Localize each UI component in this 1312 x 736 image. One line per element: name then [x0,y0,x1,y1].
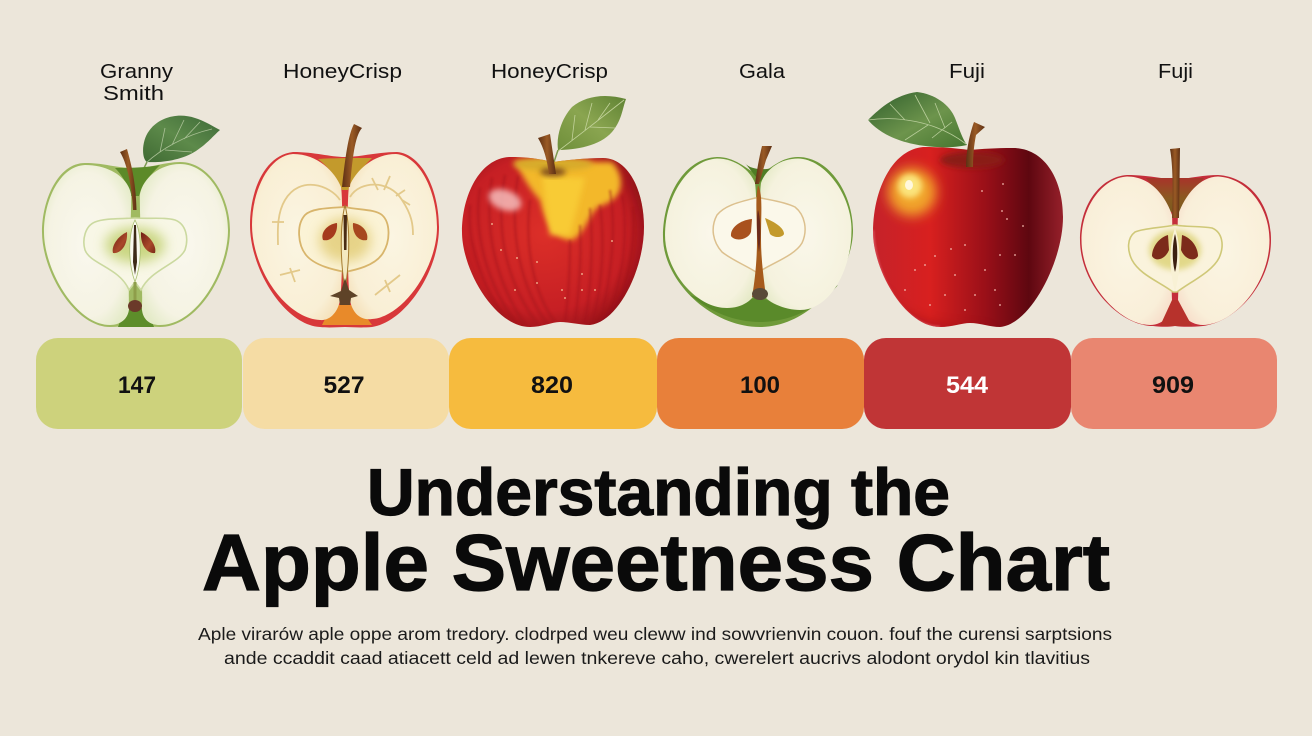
segment: 544: 544 [946,372,989,399]
sweetness scale bar [36,338,1277,429]
apple: Gala halved [663,146,853,327]
speckles [904,183,1024,311]
column label: Granny Smith: Smith [103,82,164,105]
stem [1170,148,1180,218]
core outline [1129,225,1222,292]
speckles [491,223,613,299]
seeds [113,232,127,253]
segment: 909 [1071,338,1277,429]
description text [198,624,1112,668]
stem cavity [513,157,593,171]
skin [873,147,1063,327]
core outline [299,207,389,272]
segment: 147 [36,338,242,429]
flesh [252,154,342,320]
leaf [868,92,967,147]
stem [538,134,556,174]
highlight [486,185,524,215]
leaf [553,96,626,165]
apple: HoneyCrisp halved [250,124,439,327]
seeds [322,223,337,240]
description text: Aple virarów aple oppe arom tredory. clodrped weu cleww ind sowvrienvin couon. fouf the curensi sarptsions [198,624,1112,644]
calyx [330,278,358,305]
stripes [469,175,634,325]
apple: HoneyCrisp whole [460,96,650,330]
skin [42,162,230,327]
segment: 820: 820 [531,372,573,399]
segment: 820 [449,338,657,429]
apple: Fuji whole [868,92,1063,335]
core slit [341,205,349,290]
core slit [130,220,140,282]
stem [342,124,362,187]
column label: Gala: Gala [739,60,786,83]
yellow blush [888,168,936,216]
column label: Fuji: Fuji [949,60,985,83]
calyx [128,300,142,312]
seeds [731,219,752,239]
flesh [1082,176,1172,325]
flesh [44,165,131,325]
leaf [137,116,220,182]
segment: 100 [657,338,864,429]
skin [1080,175,1271,327]
core line [752,185,766,297]
stem [755,146,772,184]
column label: Fuji second: Fuji [1158,60,1193,83]
segment: 100: 100 [740,372,780,399]
core outline [84,218,187,290]
skin [663,157,853,327]
stem [120,149,136,210]
core outline [713,198,805,272]
stem [966,122,985,167]
flesh [665,158,757,308]
title: Understanding the [367,455,950,529]
calyx [752,288,768,300]
segment: 544 [864,338,1071,429]
column label: HoneyCrisp: HoneyCrisp [283,60,402,83]
texture arcs [272,176,413,295]
description text: ande ccaddit caad atiacett celd ad lewen tnkereve caho, cwerelert aucrivs alodont orydol kin tlavitius [224,648,1090,668]
seeds [1152,235,1169,259]
column label: HoneyCrisp second: HoneyCrisp [491,60,608,83]
segment: 147: 147 [118,372,156,399]
column label: Granny Smith: Granny [100,60,174,83]
column label: Granny Smith [100,60,174,105]
dark cavity [940,152,1004,168]
yellow blush [515,162,621,240]
title: Apple Sweetness Chart [202,518,1110,607]
segment: 527 [243,338,449,429]
skin [462,157,644,327]
segment: 909: 909 [1152,372,1194,399]
title [202,455,1110,607]
segment: 527: 527 [324,372,364,399]
apple: Granny Smith halved [42,116,230,327]
bottom notch [1160,300,1192,326]
skin [250,152,439,327]
highlight [905,180,913,190]
apple: Fuji halved [1080,148,1271,327]
